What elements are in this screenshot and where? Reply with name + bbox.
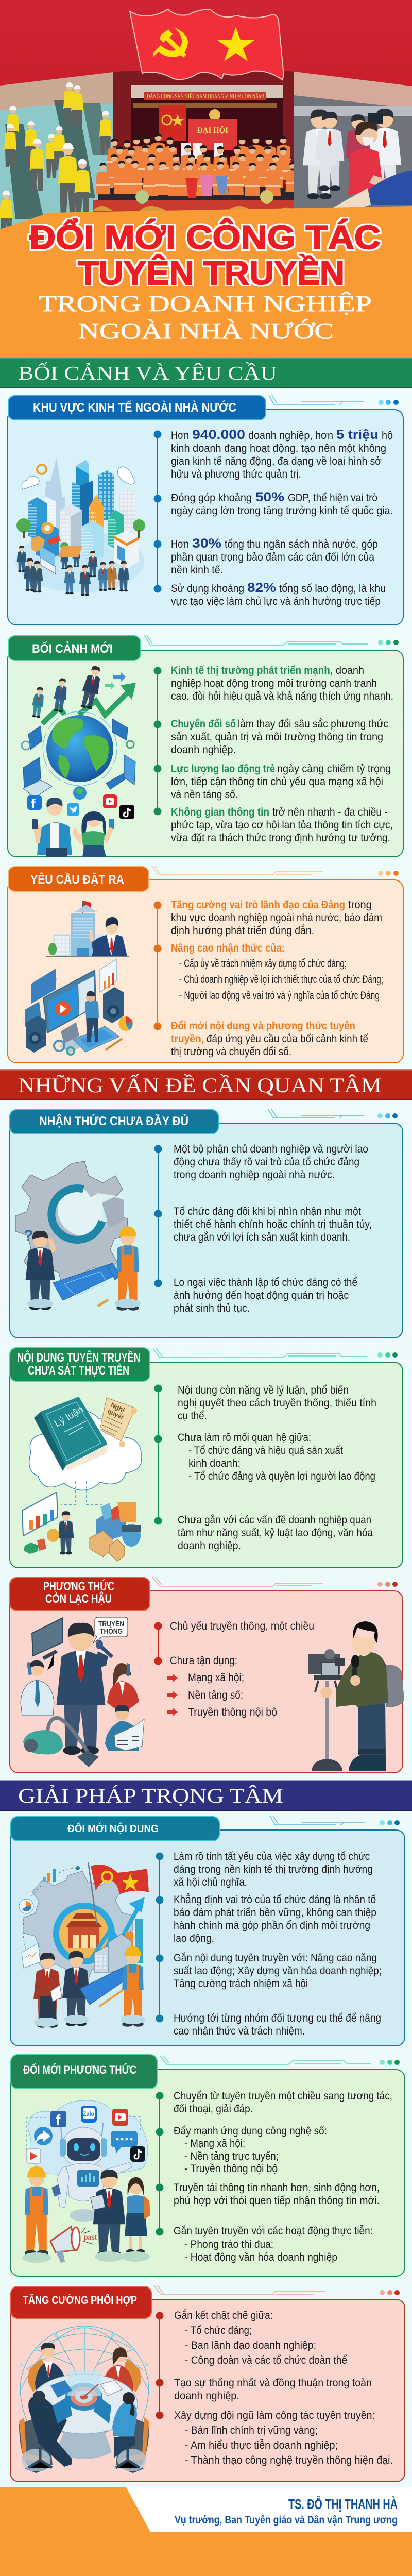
text block: nặng về lý luận: Nội dung còn nặng về lý luận, phổ biến (178, 1384, 349, 1396)
tab: nội dung tuyên truyền: NỘI DUNG TUYÊN TRUYỀN (17, 1350, 141, 1365)
text block: tăng cường vai trò (171, 899, 382, 937)
text: nghị quyết: Nghị (110, 1401, 126, 1414)
text block: chuyển đổi số: sản xuất, quản trị và môi trường thông tin trong (171, 731, 383, 743)
illustration: broken gear with manager and worker: ? (24, 1227, 33, 1244)
text block: gắn kết chặt chẽ: Gắn kết chặt chẽ giữa: (174, 2310, 273, 2321)
tab: nội dung tuyên truyền: CHƯA SÁT THỰC TIỄN (28, 1363, 129, 1378)
text block: mối quan hệ (178, 1432, 375, 1482)
text block: 940.000 doanh nghiệp (171, 428, 393, 480)
text block: tạo sự thống nhất: doanh nghiệp. (174, 2390, 239, 2402)
text block: xây dựng đội ngũ (174, 2410, 393, 2466)
timeline (159, 1856, 160, 2019)
text block: chuyển đổi số: Chuyển đổi số (171, 718, 236, 730)
text block: không gian thông tin (171, 806, 393, 844)
text block: tạo sự thống nhất: Tạo sự thống nhất và đồng thuận trong toàn (174, 2377, 372, 2389)
panel: tăng cường phối hợp (10, 2285, 405, 2482)
text block: hướng tới từng nhóm (174, 2012, 381, 2037)
header collage photo (0, 70, 412, 239)
photo: factory workers (0, 70, 116, 239)
text block: truyền tải thông tin: phù hợp với thói quen tiếp nhận thông tin mới. (174, 2195, 380, 2207)
illustration: cameraman (308, 1621, 404, 1771)
text block: hướng tới từng nhóm: cao nhận thức và trách nhiệm. (174, 2025, 305, 2037)
text block: khẳng định vai trò: bảo đảm phát triển bền vững, không can thiệp (174, 1907, 376, 1919)
icon: vacuum cleaner (47, 1718, 88, 1752)
tab: yêu cầu đặt ra (8, 867, 149, 891)
text block: 30% ngân sách: phần quan trọng bảo đảm các cân đối lớn của (171, 551, 374, 563)
text block: 82% lao động: Sử dụng khoảng (171, 583, 244, 595)
illustration: robot and social platforms (22, 2100, 150, 2263)
text block: gắn kết chặt chẽ: - Tổ chức đảng; (185, 2325, 252, 2336)
text block: 940.000 doanh nghiệp: hữu và phương thức quản trị. (171, 468, 301, 480)
title (29, 218, 381, 344)
tab: bối cảnh mới (8, 636, 141, 660)
text block: xây dựng đội ngũ: Xây dựng đội ngũ làm công tác tuyên truyền: (174, 2410, 375, 2421)
text block: 940.000 doanh nghiệp: kinh doanh đang hoạt động, tạo nên một không (171, 443, 386, 454)
text: lý luận: Lý luận (53, 1404, 85, 1429)
text block: 50% GDP: Đóng góp khoảng (171, 492, 252, 504)
text block: mối quan hệ: kinh doanh; (188, 1458, 241, 1469)
text block: khẳng định vai trò: lao động. (174, 1933, 214, 1944)
footer band (0, 2487, 412, 2576)
arrow: mạng xã hội (167, 1674, 178, 1682)
panel: phương thức còn lạc hậu (10, 1577, 404, 1773)
timeline (158, 1149, 159, 1283)
tab: đổi mới phương thức: ĐỔI MỚI PHƯƠNG THỨC (23, 2063, 136, 2076)
text block: 82% lao động: vực tạo việc làm chủ lực và ảnh hưởng trực tiếp (171, 596, 381, 607)
text block: gắn kết chặt chẽ: - Ban lãnh đạo doanh nghiệp; (185, 2340, 316, 2351)
text block: 30% ngân sách: tổng thu ngân sách nhà nước, góp (225, 538, 378, 550)
text block: 940.000 doanh nghiệp: hộ (382, 430, 393, 442)
text block: gắn kết chặt chẽ (174, 2310, 347, 2366)
illustration: digital globe and social media: f (31, 796, 36, 811)
tab: tăng cường phối hợp (11, 2286, 151, 2318)
text block: đẩy mạnh công nghệ số (174, 2125, 327, 2175)
text block: chuyển đổi số: làm thay đổi sâu sắc phương thức (238, 718, 388, 730)
text block: đổi mới nội dung: đáp ứng yêu cầu của bối cảnh kinh tế (207, 1033, 368, 1045)
text block: kinh tế thị trường: doanh (336, 665, 364, 676)
text block: xây dựng đội ngũ: - Am hiểu thực tiễn doanh nghiệp; (185, 2439, 338, 2451)
text block: 50% GDP: 50% (255, 490, 284, 504)
text block: gắn tuyên truyền (174, 2225, 373, 2263)
text block: tổ chức đảng: chưa gắn với lợi ích sản xuất kinh doanh. (174, 1231, 350, 1243)
text block: 940.000 doanh nghiệp: gian kinh tế năng động, đa dạng về loại hình sở (171, 455, 382, 467)
photo: party congress group (93, 70, 304, 219)
text block: lực lượng lao động trẻ (171, 763, 391, 801)
text block: 30% ngân sách (171, 536, 378, 576)
title: ĐỔI MỚI CÔNG TÁC (29, 218, 381, 256)
text block: chưa tận dụng: Chưa tận dụng: (170, 1655, 237, 1667)
tab: phương thức còn lạc hậu: PHƯƠNG THỨC (43, 1579, 114, 1594)
illustration: book on cloud (22, 1397, 141, 1561)
text block: nâng cao nhận thức (171, 942, 383, 1002)
text block: chưa tận dụng: Truyền thông nội bộ (188, 1706, 277, 1718)
text block: nâng cao nhận thức: - Cấp ủy về trách nhiệm xây dựng tổ chức đảng; (179, 958, 347, 970)
text block: vấn đề doanh nghiệp quan tâm: tâm như năng suất, kỷ luật lao động, văn hóa (178, 1527, 373, 1539)
text block: xây dựng đội ngũ: - Bản lĩnh chính trị vững vàng; (185, 2425, 318, 2436)
text block: tăng cường vai trò: trong (348, 899, 372, 911)
tab: nhận thức chưa đầy đủ: NHẬN THỨC CHƯA ĐẦY ĐỦ (39, 1113, 188, 1128)
tab: bối cảnh mới: BỐI CẢNH MỚI (32, 641, 113, 656)
text block: khẳng định vai trò: hành chính mà góp phần ổn định môi trường (174, 1920, 370, 1931)
section heading: giải pháp trọng tâm (0, 1780, 412, 1811)
text block: kinh tế thị trường: nghiệp hoạt động trong môi trường cạnh tranh (171, 677, 377, 689)
tab: tăng cường phối hợp: TĂNG CƯỜNG PHỐI HỢP (23, 2293, 137, 2307)
text block: nâng cao nhận thức: Nâng cao nhận thức của: (171, 942, 285, 954)
text block: tạo sự thống nhất (174, 2377, 372, 2402)
text block: vấn đề doanh nghiệp quan tâm: Chưa gắn với các vấn đề doanh nghiệp quan (178, 1514, 371, 1526)
text block: kinh tế thị trường (171, 665, 393, 702)
text block: khẳng định vai trò (174, 1893, 376, 1944)
illustration: digital globe and social media (22, 665, 136, 857)
tab: khu vực kinh tế: KHU VỰC KINH TẾ NGOÀI NHÀ NƯỚC (33, 400, 236, 415)
arrow: nền tảng số (167, 1691, 178, 1699)
text block: 940.000 doanh nghiệp: 5 triệu (336, 428, 379, 442)
panel: bối cảnh mới (8, 635, 403, 857)
text block: tăng cường vai trò: Tăng cường vai trò lãnh đạo của Đảng (171, 899, 345, 911)
text block: nặng về lý luận: cụ thể. (178, 1410, 207, 1422)
text block: chưa tận dụng: Mạng xã hội; (188, 1672, 244, 1684)
text block: một bộ phận: trong doanh nghiệp ngoài nhà nước. (174, 1169, 335, 1181)
timeline (157, 434, 158, 589)
text block: gắn nội dung (174, 1952, 382, 1990)
text block: lực lượng lao động trẻ: ngày càng chiếm tỷ trọng (277, 763, 391, 775)
text block: 50% GDP (171, 490, 393, 517)
text block: nặng về lý luận (178, 1384, 376, 1422)
text block: 30% ngân sách: Hơn (171, 538, 189, 550)
text block: lo ngại (174, 1277, 357, 1314)
text block: lo ngại: Lo ngại việc thành lập tổ chức đảng có thể (174, 1277, 357, 1289)
section heading: bối cảnh và yêu cầu (0, 357, 412, 388)
tab: yêu cầu đặt ra: YÊU CẦU ĐẶT RA (30, 872, 124, 887)
tab: khu vực kinh tế (8, 396, 266, 420)
text block: 940.000 doanh nghiệp: 940.000 (192, 428, 245, 442)
title: TRONG DOANH NGHIỆP (39, 291, 372, 316)
text block: lo ngại: ảnh hưởng đến hoạt động quản trị hoặc (174, 1290, 349, 1301)
text block: tổ chức đảng: thiết chế hành chính hoặc chính trị thuần túy, (174, 1218, 372, 1230)
text: truyền thông: TRUYỀN (98, 1620, 124, 1629)
illustration: one-way communication (21, 1617, 144, 1767)
text block: gắn nội dung: Gắn nội dung tuyên truyền với: Nâng cao năng (174, 1952, 377, 1964)
text block: mối quan hệ: - Tổ chức đảng và hiệu quả sản xuất (188, 1445, 343, 1456)
text block: không gian thông tin: phức tạp, vừa tạo cơ hội lan tỏa thông tin tích cực, (171, 819, 393, 831)
text block: tăng cường vai trò: định hướng phát triển đúng đắn. (171, 925, 314, 937)
text block: gắn kết chặt chẽ: - Công đoàn và các tổ chức đoàn thể (185, 2354, 347, 2366)
photo: factory visit (294, 70, 412, 214)
text block: 82% lao động: 82% (247, 581, 276, 595)
text block: chuyển từ tuyên truyền (174, 2090, 392, 2115)
text block: lực lượng lao động trẻ: Lực lượng lao động trẻ (171, 763, 275, 775)
panel: đổi mới phương thức (10, 2055, 405, 2276)
icon: party flag (130, 9, 284, 80)
text block: đổi mới nội dung: truyền, (171, 1033, 204, 1045)
title: NGOÀI NHÀ NƯỚC (78, 318, 334, 344)
text block: khẳng định vai trò: Khẳng định vai trò của tổ chức đảng là nhân tố (174, 1893, 376, 1906)
tab: phương thức còn lạc hậu (10, 1578, 150, 1611)
text block: 82% lao động: tổng số lao động, là khu (279, 583, 386, 595)
illustration: robot and social platforms: f (56, 2112, 61, 2128)
text block: 50% GDP: GDP, thể hiện vai trò (288, 492, 377, 504)
text block: kinh tế thị trường: cao, đòi hỏi hiệu quả và khả năng thích ứng nhanh. (171, 690, 393, 702)
illustration: robot and social platforms: Zalo (83, 2110, 94, 2117)
text block: gắn nội dung: suất lao động; Xây dựng văn hóa doanh nghiệp; (174, 1965, 382, 1977)
tab: đổi mới nội dung (11, 1817, 219, 1841)
text block: lực lượng lao động trẻ: và nền tảng số. (171, 789, 238, 801)
section heading: giải pháp trọng tâm: GIẢI PHÁP TRỌNG TÂM (18, 1784, 283, 1807)
text block: nặng về lý luận: nghị quyết theo cách truyền thống, thiếu tính (178, 1397, 376, 1409)
red banner (0, 0, 412, 86)
text block: vấn đề doanh nghiệp quan tâm: doanh nghiệp. (178, 1540, 241, 1552)
timeline (159, 2316, 160, 2415)
section heading: những vấn đề cần quan tâm (0, 1069, 412, 1100)
panel: yêu cầu đặt ra (8, 866, 403, 1063)
text block: chưa tận dụng (167, 1655, 277, 1718)
text block: làm rõ tính tất yếu: xã hội chủ nghĩa. (174, 1876, 247, 1888)
text block: làm rõ tính tất yếu: Làm rõ tính tất yếu của việc xây dựng tổ chức (174, 1851, 370, 1862)
text block: vấn đề doanh nghiệp quan tâm (178, 1514, 373, 1552)
text block: gắn tuyên truyền: - Phong trào thi đua; (184, 2239, 273, 2250)
text block: mối quan hệ: Chưa làm rõ mối quan hệ giữa: (178, 1432, 311, 1444)
icon: hammer and sickle (153, 27, 188, 58)
text block: tổ chức đảng: Tổ chức đảng đôi khi bị nhìn nhận như một (174, 1206, 361, 1217)
tab: đổi mới nội dung: ĐỔI MỚI NỘI DUNG (67, 1822, 159, 1835)
section heading: bối cảnh và yêu cầu: BỐI CẢNH VÀ YÊU CẦU (18, 362, 277, 384)
timeline (157, 671, 158, 811)
text block: tổ chức đảng (174, 1206, 372, 1243)
panel: nhận thức chưa đầy đủ (10, 1109, 403, 1338)
text block: chuyển từ tuyên truyền: đối thoại, giải đáp. (174, 2103, 253, 2115)
text block: đẩy mạnh công nghệ số: - Truyền thông nội bộ (184, 2163, 278, 2175)
icon: star (217, 27, 254, 61)
illustration: broken gear with manager and worker (15, 1161, 141, 1311)
text block: chuyển đổi số: doanh nghiệp. (171, 744, 236, 756)
text block: truyền tải thông tin: Truyền tải thông tin nhanh hơn, sinh động hơn, (174, 2182, 380, 2194)
text block: chuyển từ tuyên truyền: Chuyển từ tuyên truyền một chiều sang tương tác, (174, 2090, 392, 2102)
text block: một bộ phận: động chưa thấy rõ vai trò của tổ chức đảng (174, 1156, 359, 1168)
text block: làm rõ tính tất yếu: đảng trong nền kinh tế thị trường định hướng (174, 1863, 373, 1875)
photo: party congress group: ĐẠI HỘI (197, 126, 228, 135)
illustration: round table meeting in network sphere (19, 2326, 149, 2472)
text block: 30% ngân sách: nền kinh tế. (171, 564, 223, 576)
text block: gắn tuyên truyền: Gắn tuyên truyền với các hoạt động thực tiễn: (174, 2225, 373, 2237)
illustration: gear, party flag and growth (19, 1862, 149, 2028)
tab: nhận thức chưa đầy đủ (10, 1110, 218, 1134)
timeline (157, 905, 158, 1026)
text block: 50% GDP: ngày càng lớn trong tăng trưởng kinh tế quốc gia. (171, 505, 393, 517)
text block: một bộ phận (174, 1143, 368, 1181)
author credit (175, 2496, 398, 2526)
text block: gắn nội dung: Tăng cường trách nhiệm xã hội (174, 1978, 308, 1990)
photo: party congress group: ĐẢNG CỘNG SẢN VIỆT NAM QUANG VINH MUÔN NĂM! (147, 92, 264, 100)
text block: chuyển đổi số (171, 718, 388, 756)
text block: đổi mới nội dung: thị trường và chuyển đổi số. (171, 1046, 291, 1058)
text block: 82% lao động (171, 581, 386, 607)
text block: xây dựng đội ngũ: - Thành thạo công nghệ truyền thông hiện đại. (185, 2454, 393, 2466)
illustration: one-way communication: THÔNG (100, 1626, 123, 1636)
illustration: city skyline (15, 457, 145, 596)
text block: gắn tuyên truyền: - Hoạt động văn hóa doanh nghiệp (184, 2251, 337, 2263)
text block: đổi mới nội dung: Đổi mới nội dung và phương thức tuyên (171, 1020, 355, 1032)
title: TUYÊN TRUYỀN (78, 254, 345, 292)
text block: không gian thông tin: Không gian thông tin (171, 806, 269, 818)
illustration: government building and leader (46, 901, 129, 956)
text block: đổi mới nội dung (171, 1020, 368, 1058)
illustration: book on cloud: quyết (107, 1407, 125, 1421)
text block: lực lượng lao động trẻ: lớn, tiếp cận thông tin chủ yếu qua mạng xã hội (171, 776, 383, 788)
text block: kinh tế thị trường: Kinh tế thị trường phát triển mạnh, (171, 665, 333, 676)
tab: phương thức còn lạc hậu: CÒN LẠC HẬU (45, 1591, 112, 1606)
illustration: digital media workstation (25, 959, 133, 1055)
orange title area (0, 206, 412, 357)
tab: đổi mới phương thức (11, 2055, 157, 2089)
text block: không gian thông tin: vừa đặt ra thách thức trong định hướng tư tưởng. (171, 832, 390, 844)
text block: chưa tận dụng: Nền tảng số; (188, 1689, 243, 1701)
text block: chủ yếu truyền thông: Chủ yếu truyền thông, một chiều (170, 1620, 314, 1632)
section heading: những vấn đề cần quan tâm: NHỮNG VẤN ĐỀ CẦN QUAN TÂM (18, 1074, 382, 1097)
panel: đổi mới nội dung (10, 1816, 405, 2046)
text block: 940.000 doanh nghiệp: Hơn (171, 430, 189, 442)
text block: tăng cường vai trò: khu vực doanh nghiệp ngoài nhà nước, bảo đảm (171, 912, 382, 924)
text block: đẩy mạnh công nghệ số: - Nền tảng trực tuyến; (184, 2150, 279, 2162)
timeline (159, 2096, 160, 2232)
text block: một bộ phận: Một bộ phận chủ doanh nghiệp và người lao (174, 1143, 368, 1155)
timeline (158, 1626, 159, 1661)
text block: 940.000 doanh nghiệp: doanh nghiệp, hơn (248, 430, 333, 442)
arrow: truyền thông nội bộ (167, 1708, 178, 1716)
text block: làm rõ tính tất yếu (174, 1851, 373, 1888)
tab: nội dung tuyên truyền (10, 1348, 150, 1381)
panel: khu vực kinh tế ngoài nhà nước (8, 395, 403, 625)
timeline (158, 1388, 159, 1521)
text block: mối quan hệ: - Tổ chức đảng và quyền lợi người lao động (188, 1470, 375, 1482)
text: past: past (84, 2233, 97, 2241)
panel: nội dung tuyên truyền chưa sát thực tiễn (10, 1348, 403, 1568)
text block: truyền tải thông tin (174, 2182, 380, 2207)
text block: 30% ngân sách: 30% (192, 536, 221, 551)
text block: lo ngại: phát sinh thủ tục. (174, 1302, 250, 1314)
text block: hướng tới từng nhóm: Hướng tới từng nhóm đối tượng cụ thể để nâng (174, 2012, 381, 2024)
text block: không gian thông tin: trở nên nhanh - đa chiều - (272, 806, 388, 818)
text block: đẩy mạnh công nghệ số: - Mạng xã hội; (184, 2138, 245, 2149)
text block: đẩy mạnh công nghệ số: Đẩy mạnh ứng dụng công nghệ số: (174, 2125, 327, 2137)
